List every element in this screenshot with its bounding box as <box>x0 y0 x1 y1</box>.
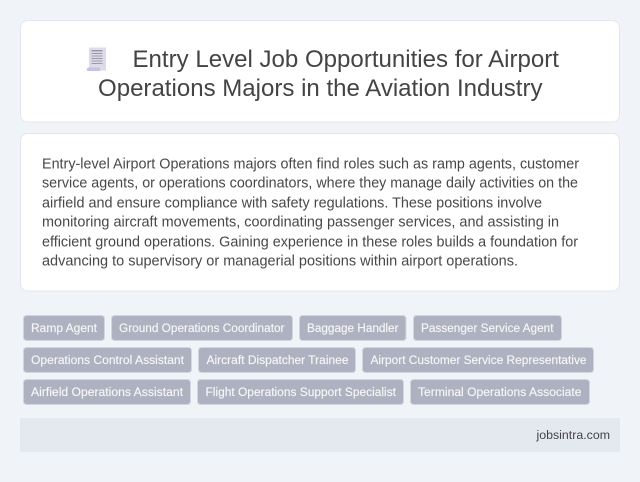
description text <box>42 156 579 270</box>
tag: Aircraft Dispatcher Trainee <box>198 348 356 372</box>
title: Entry Level Job Opportunities for Airport <box>132 46 559 73</box>
tag: Ground Operations Coordinator <box>112 316 292 340</box>
tag: Airport Customer Service Representative: Airport Customer Service Representative <box>370 353 587 367</box>
panel: title card <box>20 20 620 122</box>
description text: monitoring aircraft movements, coordinating passenger services, and assisting in <box>42 215 559 231</box>
tag: Ramp Agent <box>24 316 104 340</box>
tag: Operations Control Assistant <box>24 348 192 372</box>
panel: description card <box>20 134 620 291</box>
tag: Baggage Handler <box>300 316 406 340</box>
tag: Airfield Operations Assistant: Airfield Operations Assistant <box>31 385 184 399</box>
title: Operations Majors in the Aviation Industry <box>98 75 543 102</box>
tag: Baggage Handler: Baggage Handler <box>307 321 398 335</box>
description text: Entry-level Airport Operations majors often find roles such as ramp agents, customer <box>42 156 579 172</box>
tag: Ground Operations Coordinator: Ground Operations Coordinator <box>119 321 284 335</box>
description text: service agents, or operations coordinators, where they manage daily activities on the <box>42 176 578 192</box>
tag: Ramp Agent: Ramp Agent <box>31 321 98 335</box>
tag: Passenger Service Agent: Passenger Service Agent <box>421 321 554 335</box>
tag: Airport Customer Service Representative <box>362 348 594 372</box>
description text: airfield and ensure compliance with safety regulations. These positions involve <box>42 195 542 211</box>
title <box>98 46 559 102</box>
footer bar <box>20 418 620 452</box>
tag: Terminal Operations Associate: Terminal Operations Associate <box>418 385 582 399</box>
tag: Operations Control Assistant: Operations Control Assistant <box>31 353 185 367</box>
tag: Airfield Operations Assistant <box>24 380 190 404</box>
tag: Flight Operations Support Specialist <box>198 380 404 404</box>
tag: Passenger Service Agent <box>414 316 562 340</box>
tag: Terminal Operations Associate <box>410 380 590 404</box>
icon: document scroll <box>86 48 106 71</box>
tag: Flight Operations Support Specialist: Flight Operations Support Specialist <box>206 385 397 399</box>
description text: efficient ground operations. Gaining experience in these roles builds a foundation for <box>42 234 578 250</box>
footer credit: jobsintra.com <box>535 428 610 442</box>
tag: Aircraft Dispatcher Trainee: Aircraft Dispatcher Trainee <box>206 353 349 367</box>
description text: advancing to supervisory or managerial positions within airport operations. <box>42 254 518 270</box>
tag list <box>24 316 594 404</box>
